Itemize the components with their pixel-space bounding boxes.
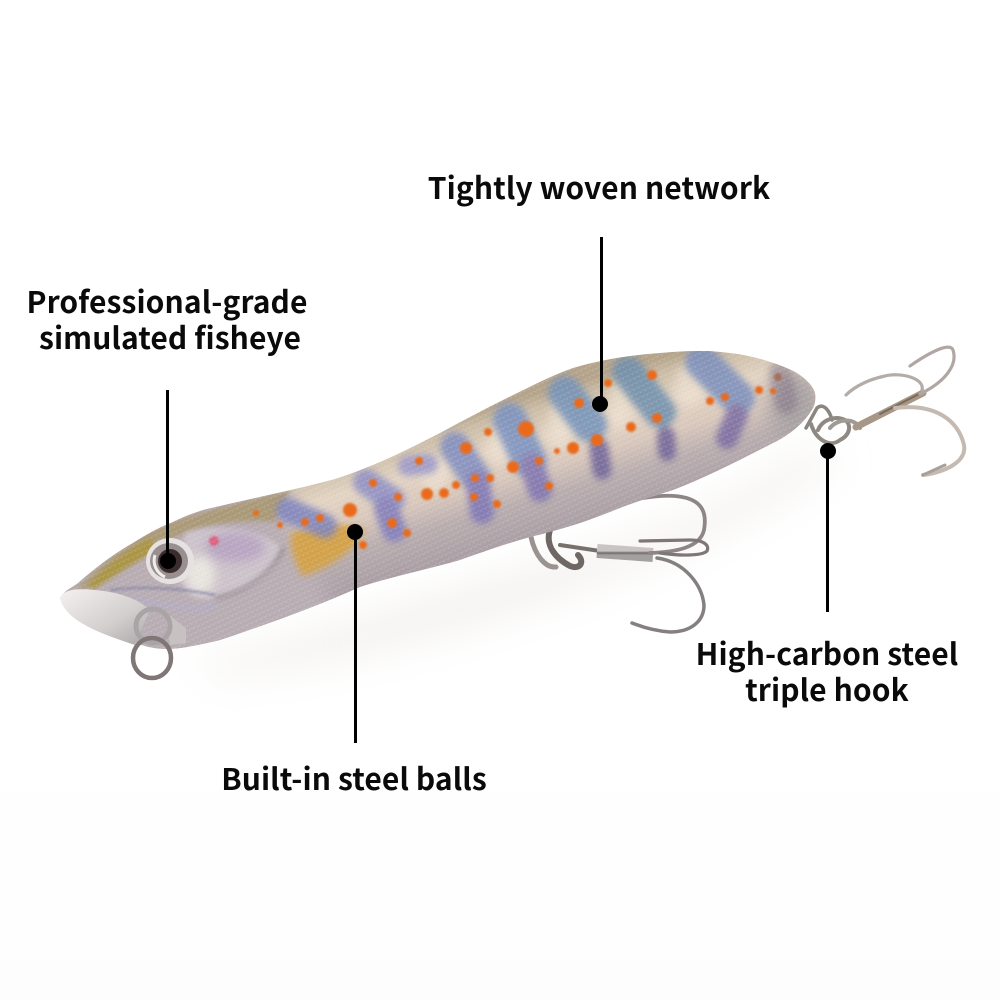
gill cover xyxy=(110,528,284,608)
callout: steel balls: Built-in steel balls xyxy=(221,755,487,799)
callout: woven network: Tightly woven network xyxy=(428,164,770,208)
diving lip xyxy=(60,589,150,645)
body tint: head and tail xyxy=(20,369,821,680)
cream highlights between bands xyxy=(421,363,705,493)
callout: triple hook: High-carbon steel xyxy=(696,630,958,674)
yellow flank patch xyxy=(291,525,365,576)
product infographic xyxy=(29,174,966,790)
orange spots xyxy=(253,370,782,549)
scale texture xyxy=(72,351,815,648)
lavender and blue bands xyxy=(288,362,786,530)
belly treble hook xyxy=(531,496,708,632)
callout: woven network xyxy=(428,164,770,412)
callout: simulated fisheye xyxy=(26,278,308,569)
front split rings xyxy=(133,609,186,678)
callout: steel balls xyxy=(221,524,487,799)
lure body xyxy=(60,351,816,649)
drop shadow xyxy=(200,450,840,675)
callout: triple hook xyxy=(696,443,958,710)
callout: triple hook: triple hook xyxy=(745,666,909,710)
callout: simulated fisheye: simulated fisheye xyxy=(39,314,301,358)
fisheye xyxy=(146,538,194,584)
tail treble hook xyxy=(806,347,964,475)
callout: simulated fisheye: Professional-grade xyxy=(26,278,308,322)
